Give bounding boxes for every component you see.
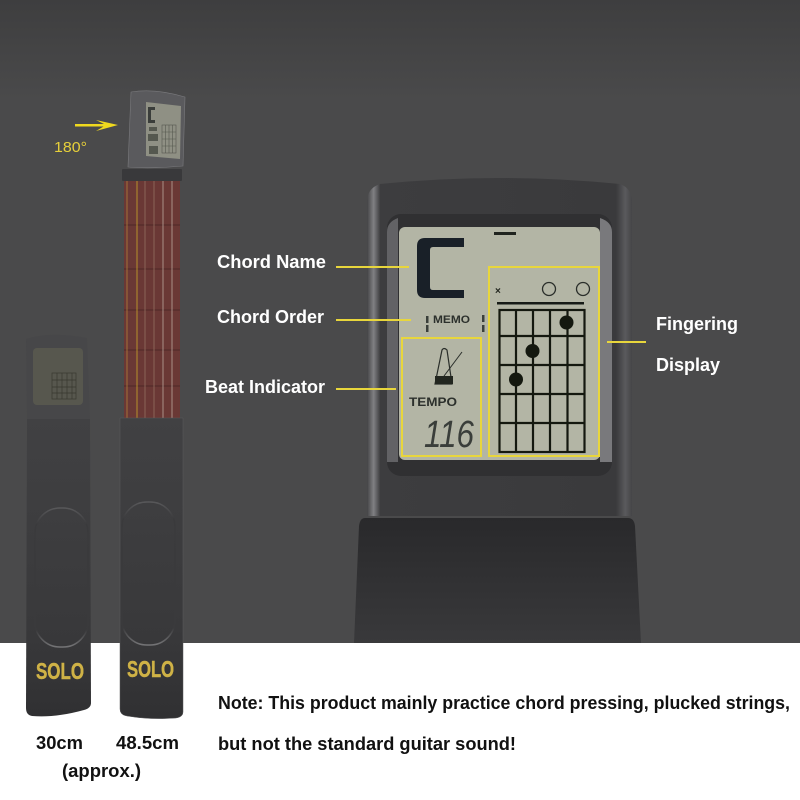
long grip pad [122, 502, 175, 645]
yellow box: beat indicator [402, 338, 481, 456]
label: Fingering Display: Fingering [656, 314, 738, 334]
LCD top indicator [494, 232, 516, 235]
long body handle [120, 418, 183, 719]
fingering display: chord grid [495, 282, 590, 452]
short body handle [26, 419, 91, 716]
label: Fingering Display [607, 314, 738, 375]
device upper body [367, 178, 632, 516]
beat indicator: metronome [435, 348, 462, 384]
note text [218, 693, 790, 754]
large device close-up [354, 178, 641, 643]
size label: 30cm: 30cm [36, 733, 83, 753]
guitar strings [127, 181, 172, 418]
grid lines [499, 310, 585, 452]
chord letter C [417, 238, 464, 298]
muted and open string marks: × [495, 286, 501, 297]
short screen grid [52, 373, 76, 399]
note text: but not the standard guitar sound! [218, 734, 516, 754]
head mini screen [146, 102, 181, 159]
label: Chord Order: Chord Order [217, 307, 324, 327]
LCD screen [399, 227, 600, 460]
rotation label: 180° [54, 139, 87, 156]
device lower body [354, 518, 641, 643]
yellow box: fingering display [489, 267, 599, 456]
note text: Note: This product mainly practice chord pressing, plucked strings, [218, 693, 790, 713]
tempo number: 116 [424, 414, 475, 456]
nut bracket [122, 169, 182, 181]
label: Fingering Display: Display [656, 355, 720, 375]
long guitar (48.5cm) [120, 91, 185, 719]
finger dots [560, 316, 574, 330]
short SOLO logo: SOLO [36, 658, 84, 684]
short guitar (30cm) [26, 335, 91, 716]
label: Beat Indicator: Beat Indicator [205, 377, 325, 397]
rotated head unit [128, 91, 185, 168]
screen bezel [387, 214, 612, 476]
short head unit [26, 335, 90, 420]
size label: approx: (approx.) [62, 761, 141, 781]
rotation arrow [75, 120, 118, 131]
long SOLO logo: SOLO [127, 656, 174, 682]
rosewood fretboard [124, 181, 180, 418]
size label: 48.5cm: 48.5cm [116, 733, 179, 753]
short grip pad [35, 508, 88, 647]
label: Chord Name: Chord Name [217, 252, 326, 272]
tempo label: TEMPO [409, 395, 457, 409]
short mini screen [33, 348, 83, 405]
chord order display [426, 314, 484, 332]
background: white lower band [0, 643, 800, 800]
chord order display: MEMO [433, 314, 470, 326]
